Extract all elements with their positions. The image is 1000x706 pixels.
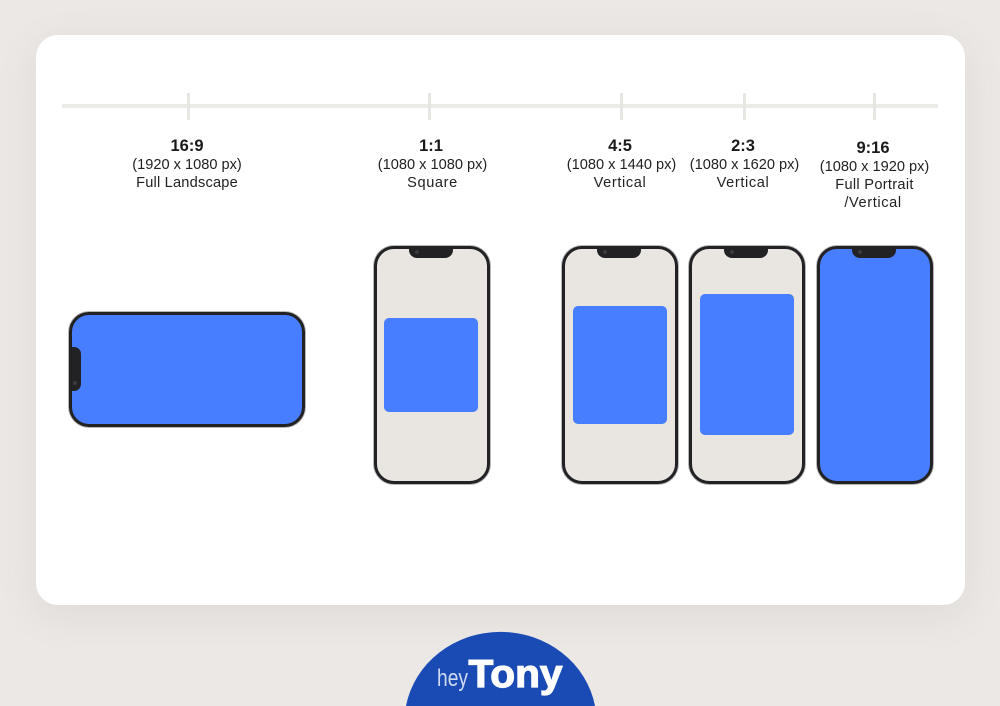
label: 2:3: 2:3 (731, 137, 755, 155)
notch: 9:16 (852, 248, 896, 258)
phone: 9:16 (817, 246, 932, 484)
label: 9:16: Full Portrait (835, 177, 914, 193)
label: 9:16: /Vertical (844, 195, 902, 211)
tick: 2:3 (743, 93, 746, 120)
tick: 4:5 (620, 93, 623, 120)
label: 4:5: 4:5 (608, 137, 632, 155)
label: 4:5: (1080 x 1440 px) (567, 157, 676, 173)
phone: 4:5 (562, 246, 678, 484)
phone: 1:1 (374, 246, 490, 484)
phone: landscape 16:9 (68, 312, 305, 426)
logo: heyTony badge (406, 632, 595, 706)
notch: 4:5 (597, 248, 641, 258)
blue frame: 4:5 (572, 306, 666, 424)
label: 16:9 (132, 137, 242, 191)
label: 1:1: (1080 x 1080 px) (378, 157, 487, 173)
blue frame: 2:3 (700, 294, 794, 434)
logo text bold: Tony (468, 653, 563, 696)
white card panel (36, 35, 965, 605)
blue frame: 1:1 (384, 318, 478, 412)
timeline axis (62, 104, 938, 108)
logo text: hey (437, 665, 468, 692)
label: 16:9: 16:9 (170, 137, 204, 155)
label: 2:3: (1080 x 1620 px) (690, 157, 799, 173)
label: 1:1 (378, 137, 487, 191)
label: 2:3: Vertical (717, 175, 769, 191)
notch: landscape (70, 346, 80, 390)
tick: 9:16 (873, 93, 876, 120)
label: 16:9: (1920 x 1080 px) (132, 157, 242, 173)
label: 1:1: Square (407, 175, 458, 191)
label: 9:16: 9:16 (856, 139, 890, 157)
tick: 16:9 (187, 93, 190, 120)
label: 1:1: 1:1 (419, 137, 443, 155)
notch: 2:3 (724, 248, 768, 258)
label: 4:5 (567, 137, 676, 191)
notch: 1:1 (409, 248, 453, 258)
phone: 2:3 (689, 246, 804, 484)
label: 16:9: Full Landscape (136, 175, 238, 191)
label: 2:3 (690, 137, 799, 191)
label: 9:16: (1080 x 1920 px) (820, 159, 929, 175)
logo ellipse (406, 632, 595, 706)
tick: 1:1 (428, 93, 431, 120)
label: 4:5: Vertical (594, 175, 646, 191)
label: 9:16 (820, 139, 929, 211)
